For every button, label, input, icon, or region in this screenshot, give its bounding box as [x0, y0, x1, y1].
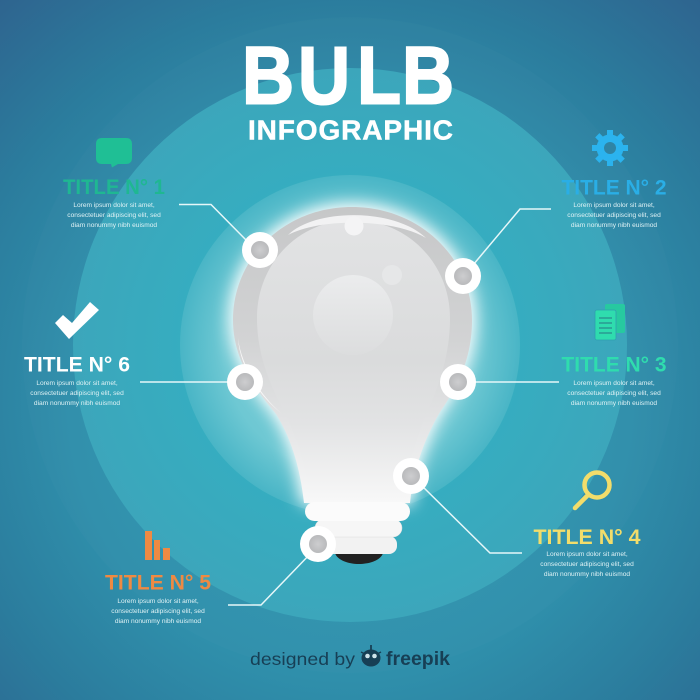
body text 6 — [30, 380, 124, 407]
marker 6 — [227, 364, 263, 400]
bulb glow — [232, 206, 473, 502]
connector 5 — [228, 552, 312, 605]
title: INFOGRAPHIC — [248, 114, 453, 146]
top crescent highlight — [288, 215, 426, 238]
connector 6 — [140, 381, 235, 383]
block: title 2 — [562, 130, 666, 229]
connector 2 — [473, 209, 551, 265]
body text 5: Lorem ipsum dolor sit amet, — [117, 598, 199, 605]
body text 4: Lorem ipsum dolor sit amet, — [546, 551, 628, 558]
body text 5 — [111, 598, 205, 625]
block: title 4 — [534, 472, 641, 578]
small reflection — [382, 265, 402, 285]
screw thread 3 — [324, 536, 397, 554]
footer credit — [250, 645, 450, 670]
body text 2: consectetuer adipiscing elit, sed — [567, 212, 661, 219]
connector 1 — [179, 204, 247, 241]
heading 6: TITLE N° 6 — [24, 354, 130, 376]
screw thread 2 — [315, 519, 402, 537]
footer credit: freepik — [386, 649, 450, 670]
body text 5: diam nonummy nibh euismod — [115, 618, 201, 625]
body text 4: consectetuer adipiscing elit, sed — [540, 561, 634, 568]
inner glass — [257, 220, 450, 503]
icon: freepik mascot — [361, 645, 381, 666]
block: title 5 — [105, 531, 211, 625]
heading 4: TITLE N° 4 — [534, 526, 641, 549]
icon: check mark — [55, 302, 99, 339]
body text 5: consectetuer adipiscing elit, sed — [111, 608, 205, 615]
icon: gear — [592, 130, 628, 166]
heading 1: TITLE N° 1 — [63, 176, 165, 199]
body text 1: Lorem ipsum dolor sit amet, — [73, 202, 155, 209]
marker 2 — [445, 258, 481, 294]
screw base bottom cap — [335, 553, 383, 564]
collar — [305, 502, 410, 521]
body text 4 — [540, 551, 634, 578]
icon: documents — [595, 304, 625, 340]
body text 3 — [567, 380, 661, 407]
block: title 1 — [63, 138, 165, 229]
highlight circle — [313, 275, 393, 355]
body text 1: consectetuer adipiscing elit, sed — [67, 212, 161, 219]
body text 2: diam nonummy nibh euismod — [571, 222, 657, 229]
title: BULB — [242, 30, 454, 122]
heading 3: TITLE N° 3 — [562, 354, 666, 376]
left edge highlight — [238, 338, 281, 413]
body text 4: diam nonummy nibh euismod — [544, 571, 630, 578]
top reflection — [344, 216, 364, 236]
connector 4 — [418, 482, 522, 553]
icon: speech bubble — [96, 138, 132, 168]
block: title 6 — [24, 302, 130, 407]
marker 5 — [300, 526, 336, 562]
heading 5: TITLE N° 5 — [105, 572, 211, 594]
marker 4 — [393, 458, 429, 494]
body text 1: diam nonummy nibh euismod — [71, 222, 157, 229]
body text 6: consectetuer adipiscing elit, sed — [30, 390, 124, 397]
heading 2: TITLE N° 2 — [562, 176, 666, 200]
body text 1 — [67, 202, 161, 229]
marker 1 — [242, 232, 278, 268]
body text 6: Lorem ipsum dolor sit amet, — [36, 380, 118, 387]
body text 6: diam nonummy nibh euismod — [34, 400, 120, 407]
glass — [233, 207, 472, 503]
footer credit: designed by — [250, 649, 355, 669]
body text 3: diam nonummy nibh euismod — [571, 400, 657, 407]
body text 3: consectetuer adipiscing elit, sed — [567, 390, 661, 397]
body text 3: Lorem ipsum dolor sit amet, — [573, 380, 655, 387]
body text 2 — [567, 202, 661, 229]
light bulb — [233, 207, 472, 564]
body text 2: Lorem ipsum dolor sit amet, — [573, 202, 655, 209]
connector 3 — [465, 381, 559, 383]
icon: bar chart — [145, 531, 170, 560]
icon: magnifying glass — [575, 472, 610, 508]
marker 3 — [440, 364, 476, 400]
block: title 3 — [562, 304, 666, 407]
